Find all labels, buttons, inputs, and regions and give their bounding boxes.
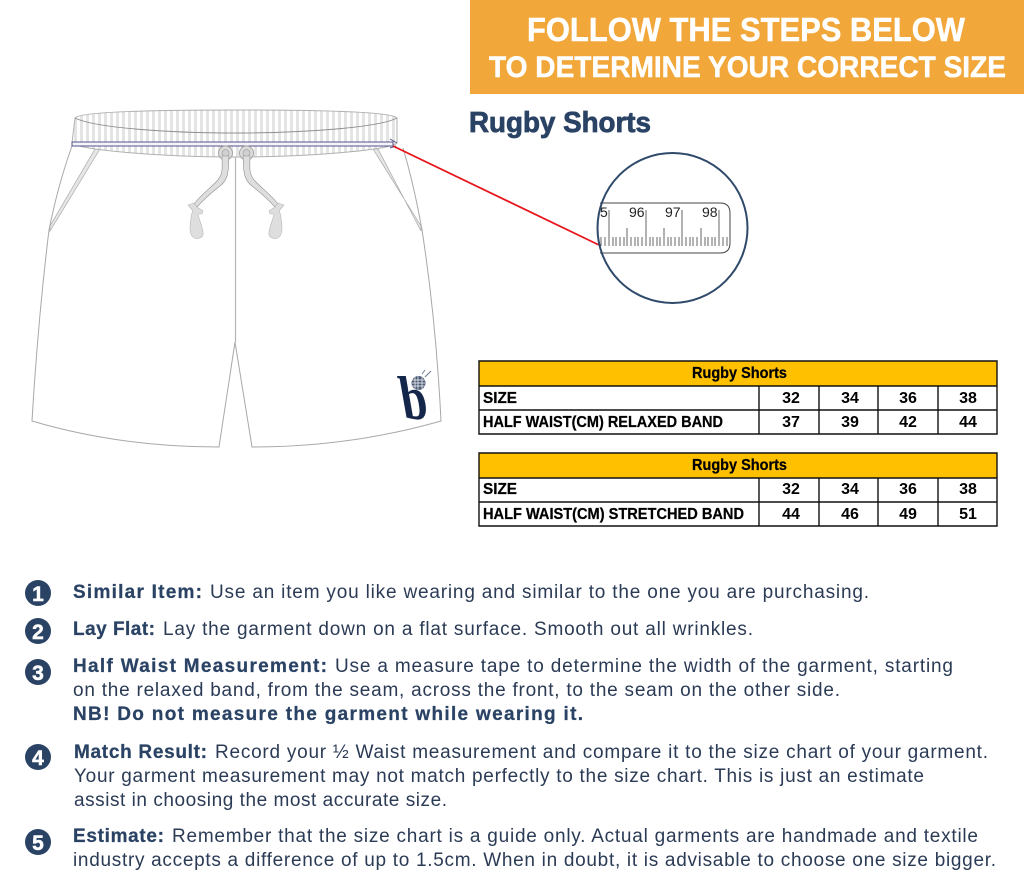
tape numbers: 98 bbox=[702, 204, 718, 220]
step 4 text: Record your ½ Waist measurement and compare it to the size chart of your garment. bbox=[215, 742, 988, 763]
left pocket bbox=[50, 149, 100, 231]
tape ticks bbox=[601, 210, 727, 246]
measurement row: 51 bbox=[959, 506, 977, 523]
size row: SIZE bbox=[483, 390, 517, 407]
step 4 bbox=[25, 742, 988, 811]
size row: 36 bbox=[899, 390, 917, 407]
step 4 text: assist in choosing the most accurate size. bbox=[74, 790, 447, 811]
badge 2 bbox=[25, 618, 51, 644]
size row: 32 bbox=[782, 481, 800, 498]
measurement row: 37 bbox=[782, 414, 800, 431]
right drawstring bbox=[240, 146, 284, 239]
step 3 text: on the relaxed band, from the seam, across the front, to the seam on the other side. bbox=[73, 680, 840, 701]
red pointer line bbox=[393, 146, 599, 245]
step 4 text bbox=[74, 742, 988, 811]
size row: 36 bbox=[899, 481, 917, 498]
tape numbers: 5 bbox=[600, 204, 608, 220]
yarn ball bbox=[412, 370, 431, 390]
step 3 text: Use a measure tape to determine the width of the garment, starting bbox=[335, 656, 953, 677]
shorts body bbox=[32, 146, 441, 447]
badge 3: 3 bbox=[32, 662, 44, 685]
step 1 bbox=[25, 580, 869, 606]
table title: Rugby Shorts bbox=[692, 457, 787, 474]
measurement row: 44 bbox=[959, 414, 977, 431]
badge 4: 4 bbox=[32, 747, 44, 770]
table grid bbox=[479, 361, 997, 434]
heading line 1: FOLLOW THE STEPS BELOW bbox=[527, 11, 966, 48]
size row: 38 bbox=[959, 481, 977, 498]
step 5 text: Remember that the size chart is a guide only. Actual garments are handmade and textile bbox=[172, 826, 978, 847]
shorts illustration bbox=[32, 110, 441, 447]
badge 3 bbox=[25, 659, 51, 685]
step 3 bbox=[25, 656, 953, 725]
waistband inner opening bbox=[75, 118, 397, 133]
right pocket bbox=[373, 149, 421, 231]
size row bbox=[483, 481, 977, 498]
magnifier with tape measure bbox=[598, 153, 748, 303]
measurement row: 46 bbox=[841, 506, 859, 523]
badge 5: 5 bbox=[32, 832, 44, 855]
badge 4 bbox=[25, 744, 51, 770]
measurement row: 39 bbox=[841, 414, 859, 431]
step 2 text: Lay the garment down on a flat surface. Smooth out all wrinkles. bbox=[163, 619, 753, 640]
step 4 text: Match Result: bbox=[74, 742, 207, 763]
tape outline bbox=[600, 203, 730, 253]
measurement row: HALF WAIST(CM) STRETCHED BAND bbox=[483, 506, 744, 523]
step 5 text: Estimate: bbox=[73, 826, 164, 847]
size table stretched bbox=[479, 453, 997, 526]
badge 1: 1 bbox=[32, 583, 44, 606]
badge 1 bbox=[25, 580, 51, 606]
centre seam bbox=[234, 157, 236, 342]
measurement row: 49 bbox=[899, 506, 917, 523]
size table relaxed bbox=[479, 361, 997, 434]
step 1 text: Similar Item: bbox=[73, 582, 202, 603]
table grid bbox=[479, 453, 997, 526]
waist measure arrow bbox=[72, 139, 397, 148]
step 3 text: NB! Do not measure the garment while wearing it. bbox=[73, 704, 583, 725]
step 5 text bbox=[73, 826, 996, 871]
step 5 text: industry accepts a difference of up to 1.5cm. When in doubt, it is advisable to choose one size bigger. bbox=[73, 850, 996, 871]
size row: 34 bbox=[841, 390, 859, 407]
step 5 bbox=[25, 826, 996, 871]
size row: 34 bbox=[841, 481, 859, 498]
table title: Rugby Shorts bbox=[692, 365, 787, 382]
step 2 bbox=[25, 618, 753, 644]
header banner bbox=[470, 0, 1024, 94]
magnifier ring bbox=[598, 153, 748, 303]
badge 5 bbox=[25, 829, 51, 855]
tape numbers: 97 bbox=[665, 204, 681, 220]
step 3 text: Half Waist Measurement: bbox=[73, 656, 327, 677]
measurement row: 42 bbox=[899, 414, 917, 431]
measurement row bbox=[483, 506, 977, 523]
step 1 text: Use an item you like wearing and similar to the one you are purchasing. bbox=[210, 582, 869, 603]
size row bbox=[483, 390, 977, 407]
badge 2: 2 bbox=[32, 621, 44, 644]
product title: Rugby Shorts bbox=[469, 107, 651, 139]
left drawstring bbox=[188, 146, 232, 239]
brand logo: b bbox=[394, 363, 432, 433]
waistband bbox=[72, 110, 397, 157]
measurement row: 44 bbox=[782, 506, 800, 523]
step 2 text: Lay Flat: bbox=[73, 619, 155, 640]
tape numbers bbox=[600, 204, 718, 220]
tape numbers: 96 bbox=[629, 204, 645, 220]
step 4 text: Your garment measurement may not match perfectly to the size chart. This is just an estimate bbox=[74, 766, 924, 787]
size row: SIZE bbox=[483, 481, 517, 498]
step 3 text bbox=[73, 656, 953, 725]
measurement row bbox=[483, 414, 977, 431]
measurement row: HALF WAIST(CM) RELAXED BAND bbox=[483, 414, 723, 431]
size row: 32 bbox=[782, 390, 800, 407]
size row: 38 bbox=[959, 390, 977, 407]
